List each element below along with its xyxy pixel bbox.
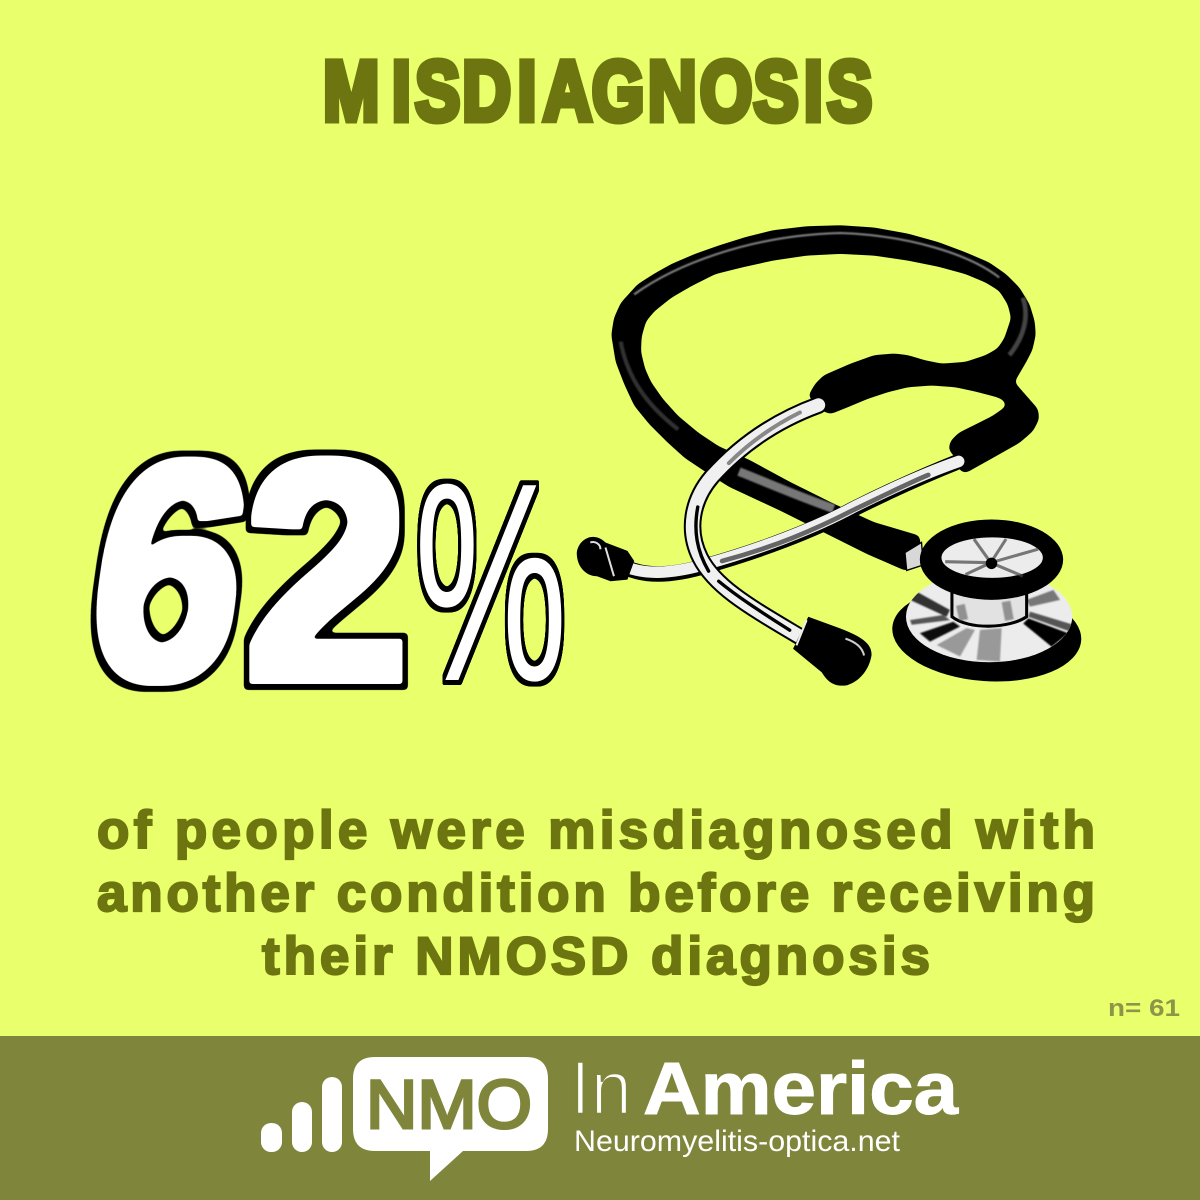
left ear tip — [577, 537, 634, 581]
website address: Neuromyelitis-optica.net — [574, 1125, 901, 1158]
body text: their NMOSD diagnosis — [262, 927, 930, 986]
big number: 62% — [71, 396, 567, 746]
logo letters NMO: NMO — [366, 1066, 532, 1143]
metal tube: ear tube to right yoke — [619, 461, 959, 574]
wordmark: In: In — [570, 1046, 632, 1131]
tubing and yoke — [611, 225, 1039, 571]
chest piece stem — [952, 591, 1027, 626]
digit 6: 6 — [71, 398, 269, 744]
percent sign: % — [414, 424, 567, 740]
base shading wedges — [910, 590, 1073, 662]
tube highlights — [621, 233, 1026, 509]
footer band — [0, 1036, 1200, 1200]
chest piece connector — [905, 542, 923, 570]
icon: stethoscope — [577, 225, 1084, 688]
wordmark: America: America — [643, 1047, 959, 1130]
title: MISDIAGNOSIS — [323, 45, 872, 139]
metal tube: ear tube to left yoke — [693, 405, 818, 639]
digit 2: 2 — [244, 396, 409, 746]
chest piece top rim — [920, 519, 1063, 600]
icon: signal bars — [261, 1077, 342, 1152]
chest piece diaphragm — [941, 537, 1043, 578]
body text: another condition before receiving — [97, 864, 1095, 923]
sample size note: n= 61 — [1108, 995, 1180, 1022]
icon: speech bubble — [353, 1057, 548, 1181]
logo — [261, 1046, 959, 1181]
chest piece base — [889, 580, 1084, 688]
body text: of people were misdiagnosed with — [97, 801, 1095, 860]
right ear tip — [793, 617, 872, 686]
